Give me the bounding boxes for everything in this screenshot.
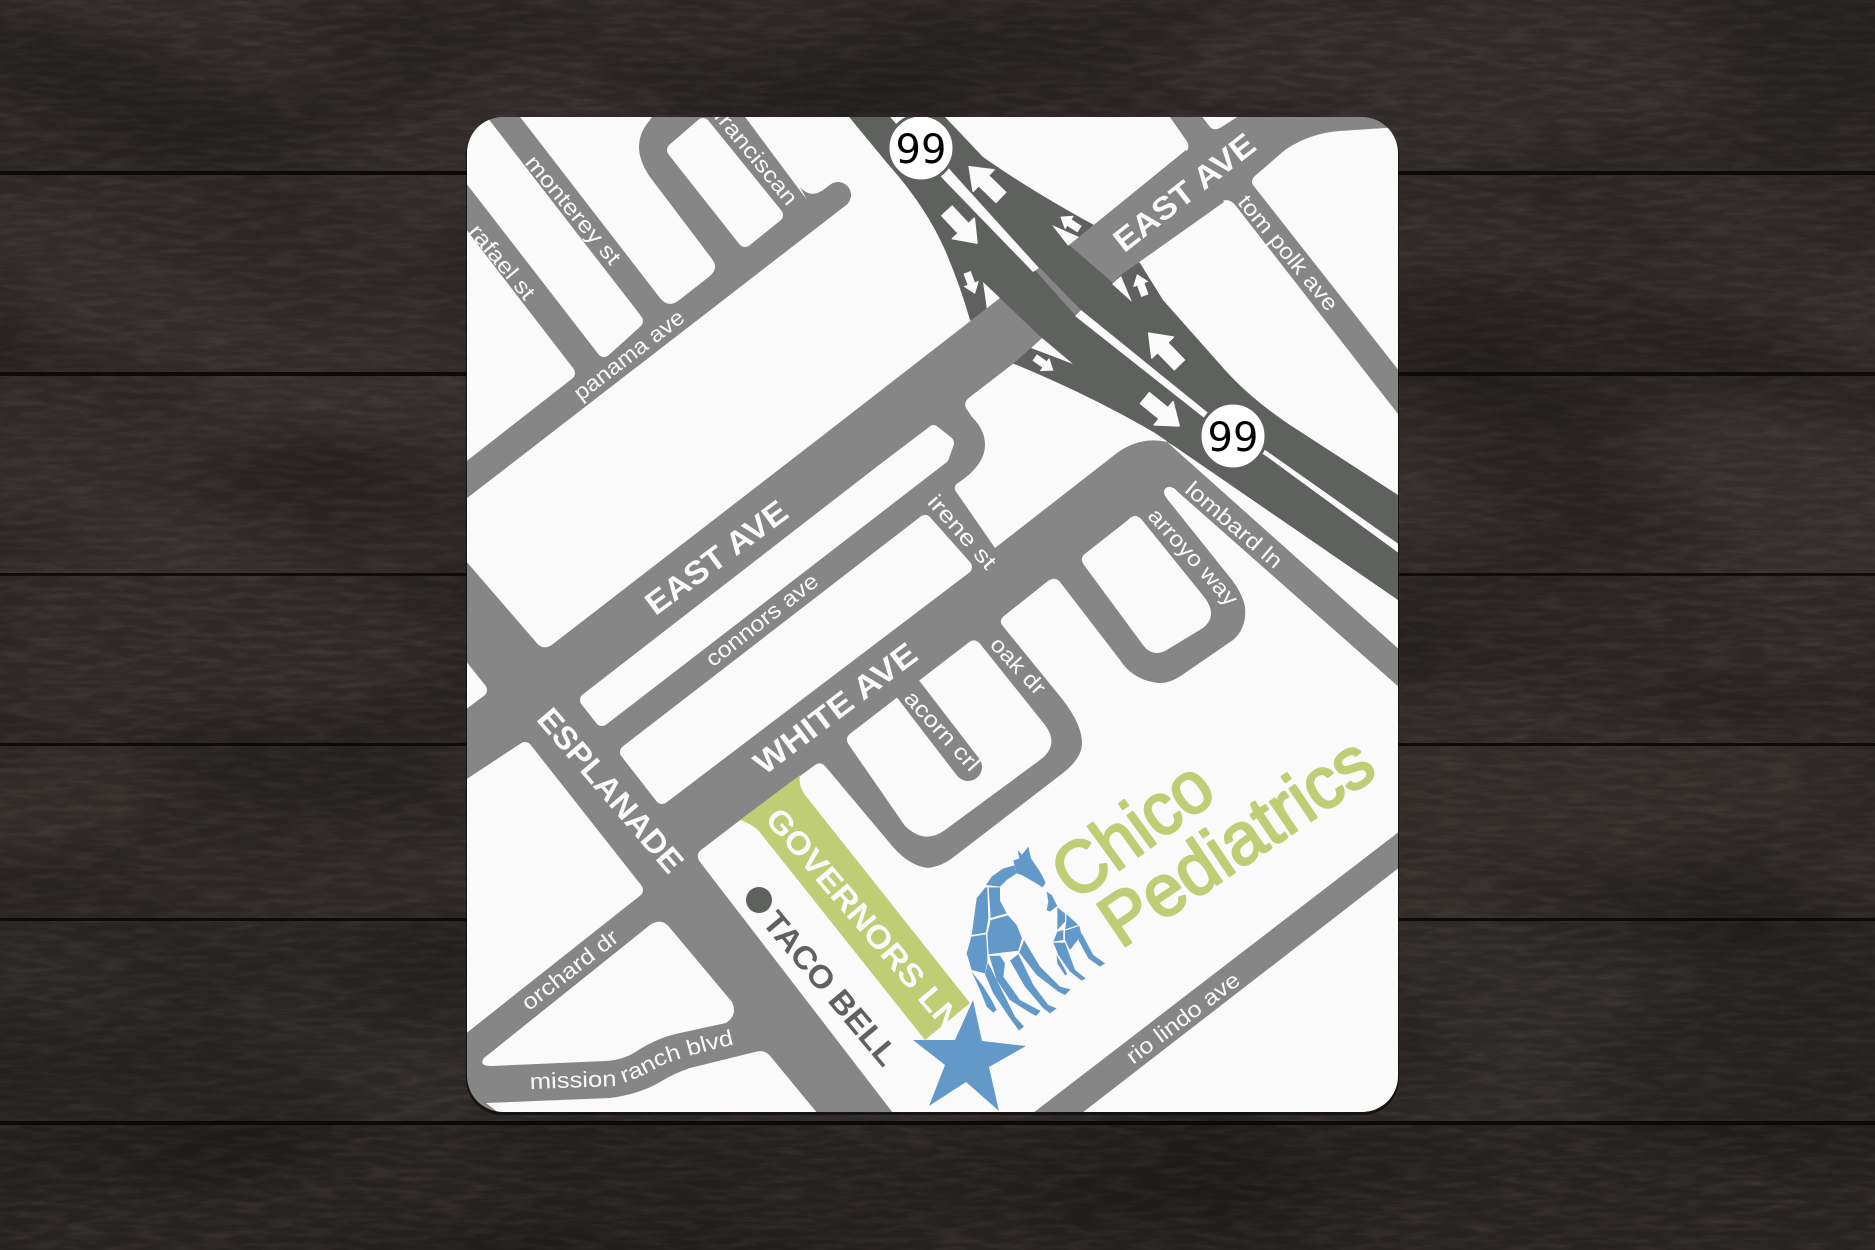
card shadow xyxy=(466,118,1399,1115)
street label: monterey st: monterey st xyxy=(520,150,626,270)
highway 99: ramps and lanes xyxy=(840,100,1410,604)
road: acorn crl stub xyxy=(895,672,968,767)
road: panama ave xyxy=(455,195,838,491)
street label: lombard ln: lombard ln xyxy=(1181,476,1288,573)
street label: arroyo way: arroyo way xyxy=(1143,503,1243,611)
street label: franciscan: franciscan xyxy=(709,104,803,210)
landmark label: Taco Bell: TACO BELL xyxy=(756,904,905,1073)
ramp islands xyxy=(983,225,1132,364)
road highlight: Governors Ln xyxy=(740,775,970,1040)
highway shield: 99 lower: 99 xyxy=(1208,415,1258,461)
logo text: Chico: Chico xyxy=(1036,743,1228,915)
street label: tom polk ave: tom polk ave xyxy=(1233,190,1343,316)
highway median stripes xyxy=(880,100,1400,554)
street label: East Ave upper: EAST AVE xyxy=(1106,126,1262,259)
city blocks xyxy=(440,100,1420,1114)
street label: acorn crl: acorn crl xyxy=(899,685,985,776)
text path guide: mission ranch blvd xyxy=(530,1043,740,1089)
landmark dot: Taco Bell xyxy=(746,887,772,913)
street label: orchard dr: orchard dr xyxy=(516,924,623,1015)
street label: connors ave: connors ave xyxy=(701,568,823,672)
panel: street map card xyxy=(467,117,1398,1112)
icon: giraffes logo xyxy=(967,847,1105,1031)
street label: Governors Ln: GOVERNORS LN xyxy=(759,801,969,1038)
road: franciscan xyxy=(739,117,826,208)
east ave overpass crossing xyxy=(830,150,1224,502)
icon: destination star xyxy=(913,1000,1026,1111)
arrows on highway xyxy=(936,156,1190,438)
street label: mission ranch blvd: mission ranch blvd xyxy=(531,1029,733,1089)
road base xyxy=(467,117,1398,1112)
street label: rafael st: rafael st xyxy=(464,219,540,305)
highway shield: 99 upper: 99 xyxy=(896,127,946,173)
street label: White Ave: WHITE AVE xyxy=(747,635,924,781)
street label: East Ave lower: EAST AVE xyxy=(638,493,795,622)
street label: Esplanade: ESPLANADE xyxy=(530,701,691,880)
street label: rio lindo ave: rio lindo ave xyxy=(1121,967,1245,1069)
street label: panama ave: panama ave xyxy=(569,304,689,405)
highway shield: 99 upper xyxy=(888,115,954,181)
street label: irene st: irene st xyxy=(923,489,1002,574)
highway through lanes xyxy=(998,245,1113,338)
street label: oak dr: oak dr xyxy=(985,632,1051,700)
logo text: Pediatrics: Pediatrics xyxy=(1084,721,1388,962)
highway shield: 99 lower xyxy=(1200,403,1266,469)
